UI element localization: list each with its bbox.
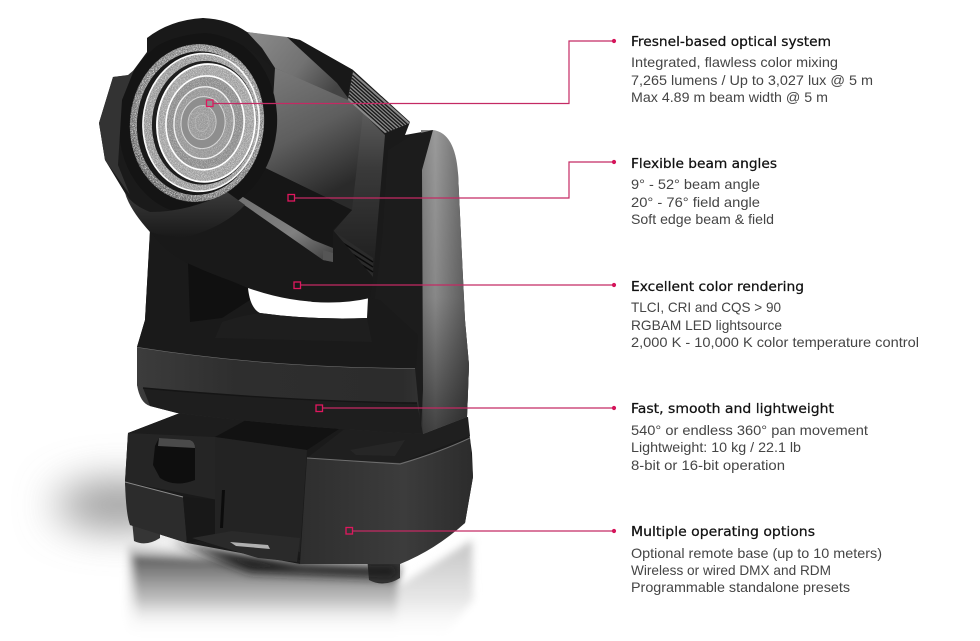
lit side face	[253, 68, 363, 210]
feature: Fast, smooth and lightweight: Fast, smooth and lightweight	[631, 402, 834, 417]
leader 1: optical system	[206, 39, 616, 106]
head housing	[247, 32, 410, 278]
feature: Excellent color rendering	[631, 280, 919, 350]
leader 5: operating options	[346, 528, 616, 534]
feature: Fresnel-based optical system	[631, 35, 873, 105]
feature: Multiple operating options	[631, 525, 882, 595]
lower vent fins	[335, 232, 373, 278]
left barn door	[99, 70, 134, 195]
head lower shell	[150, 193, 373, 302]
feature: Multiple operating options: Optional remote base (up to 10 meters)	[631, 545, 882, 561]
feature: Multiple operating options: Multiple operating options	[631, 525, 815, 540]
feature: Flexible beam angles: 9° - 52° beam angle	[631, 176, 760, 192]
feature: Flexible beam angles: 20° - 76° field angle	[631, 194, 760, 210]
feature: Flexible beam angles: Flexible beam angles	[631, 157, 777, 172]
right yoke arm	[360, 130, 469, 434]
lens rings	[130, 45, 266, 201]
feature: Excellent color rendering: TLCI, CRI and CQS > 90	[631, 299, 781, 315]
top recess	[287, 37, 353, 98]
feature: Fresnel-based optical system: Fresnel-based optical system	[631, 35, 831, 50]
base feet	[132, 520, 400, 584]
cooling fins	[348, 72, 410, 133]
lens mount ring	[110, 23, 286, 223]
feature: Excellent color rendering: RGBAM LED lightsource	[631, 317, 782, 333]
feature: Fresnel-based optical system: Max 4.89 m beam width @ 5 m	[631, 89, 828, 105]
yoke turntable	[137, 347, 469, 434]
feature: Fast, smooth and lightweight: 540° or endless 360° pan movement	[631, 422, 868, 438]
top barn door	[147, 18, 270, 65]
leader 2: beam angles	[288, 160, 616, 201]
lower right barn door	[227, 162, 352, 262]
feature: Flexible beam angles: Soft edge beam & field	[631, 211, 774, 227]
left connector box	[125, 413, 250, 543]
feature: Excellent color rendering: 2,000 K - 10,000 K color temperature control	[631, 334, 919, 350]
connector socket	[153, 438, 195, 484]
right base block	[300, 417, 473, 564]
window under head	[248, 288, 368, 318]
middle base block	[215, 418, 345, 552]
feature: Fast, smooth and lightweight: Lightweight: 10 kg / 22.1 lb	[631, 439, 801, 455]
cable tray	[192, 531, 300, 562]
feature: Excellent color rendering: Excellent color rendering	[631, 280, 804, 295]
rear shell	[330, 95, 385, 278]
bottom barn door	[125, 192, 245, 236]
feature: Fast, smooth and lightweight: 8-bit or 16-bit operation	[631, 457, 785, 473]
feature: Multiple operating options: Programmable standalone presets	[631, 579, 850, 595]
feature: Fast, smooth and lightweight	[631, 402, 868, 473]
feature: Fresnel-based optical system: 7,265 lumens / Up to 3,027 lux @ 5 m	[631, 72, 873, 88]
base unit	[125, 413, 473, 584]
feature: Fresnel-based optical system: Integrated, flawless color mixing	[631, 54, 838, 70]
leader 4: pan movement	[316, 405, 616, 412]
floor shadow	[56, 483, 180, 527]
fixture silhouette	[99, 18, 473, 564]
top strip	[247, 32, 353, 100]
moving head fixture	[99, 18, 473, 584]
yoke body and left arm	[137, 230, 418, 368]
fresnel lens	[122, 37, 272, 209]
feature: Flexible beam angles	[631, 157, 777, 227]
leader 3: color rendering	[294, 282, 616, 288]
floor reflection	[110, 540, 490, 641]
feature: Multiple operating options: Wireless or wired DMX and RDM	[631, 562, 831, 578]
